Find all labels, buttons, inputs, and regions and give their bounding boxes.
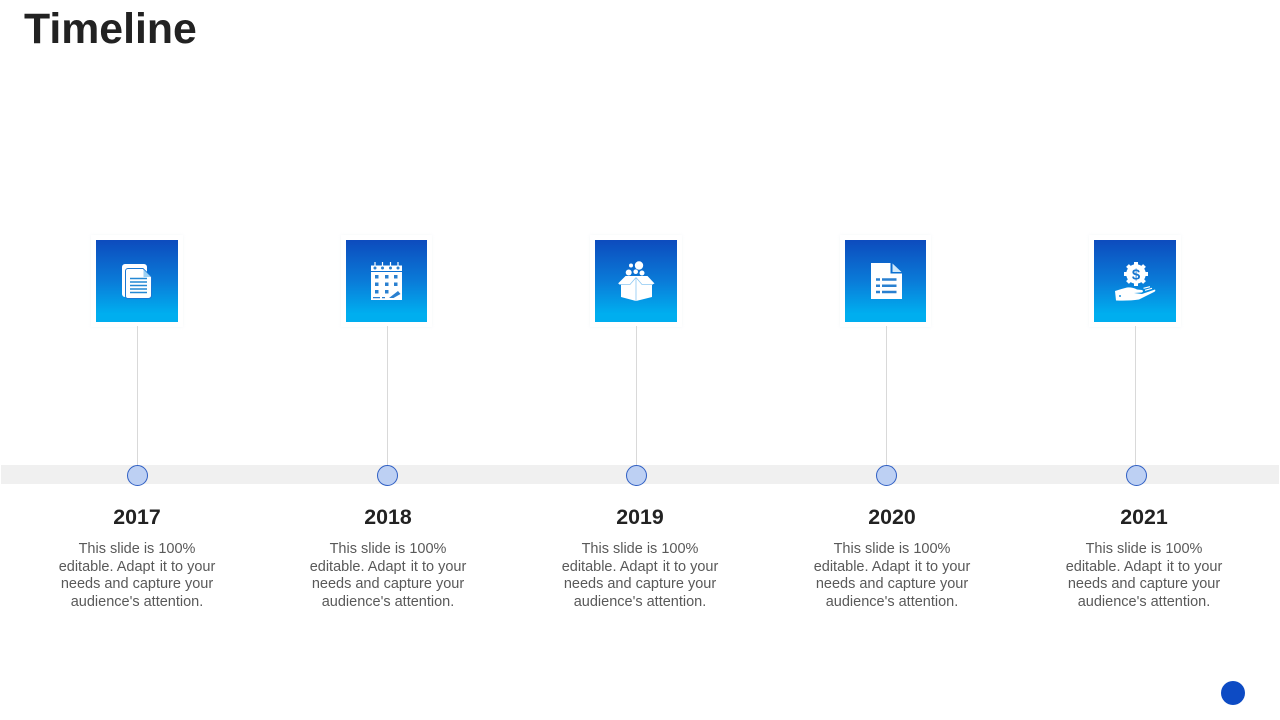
text block 2017: needs and capture your <box>61 576 213 592</box>
text block 2019: needs and capture your <box>564 576 716 592</box>
text block 2020: This slide is 100% <box>834 541 950 557</box>
marker 2019 <box>626 464 647 486</box>
text block 2019: 2019 <box>616 505 664 529</box>
text block 2020: needs and capture your <box>816 576 968 592</box>
timeline band <box>1 465 1279 484</box>
connector 2020 <box>886 326 887 466</box>
marker 2021 <box>1126 464 1146 486</box>
icon card: money gear in hand: $ <box>1132 266 1141 284</box>
text block 2017: 2017 <box>113 505 161 529</box>
icon card: list document <box>840 235 931 327</box>
marker 2020 <box>876 464 896 486</box>
text block 2018: audience's attention. <box>322 594 454 610</box>
text block 2020: editable. Adapt it to your <box>814 559 970 575</box>
text block 2019: This slide is 100% <box>582 541 698 557</box>
connector 2019 <box>636 326 637 466</box>
text block 2021: audience's attention. <box>1078 594 1210 610</box>
title: Timeline <box>24 5 197 53</box>
text block 2018 <box>310 505 466 610</box>
text block 2021: This slide is 100% <box>1086 541 1202 557</box>
text block 2017: audience's attention. <box>71 594 203 610</box>
marker 2017 <box>127 464 148 486</box>
text block 2017: This slide is 100% <box>79 541 195 557</box>
icon card: documents <box>91 235 183 327</box>
connector 2021 <box>1135 326 1136 466</box>
text block 2017 <box>59 505 216 610</box>
connector 2018 <box>387 326 388 466</box>
text block 2021: editable. Adapt it to your <box>1066 559 1222 575</box>
text block 2018: editable. Adapt it to your <box>310 559 466 575</box>
icon card: calendar <box>341 235 432 327</box>
text block 2018: needs and capture your <box>312 576 464 592</box>
icon card: money gear in hand <box>1089 235 1181 327</box>
text block 2018: This slide is 100% <box>330 541 446 557</box>
text block 2020: 2020 <box>868 505 916 529</box>
text block 2021: 2021 <box>1120 505 1168 529</box>
marker 2018 <box>376 464 398 486</box>
text block 2019: editable. Adapt it to your <box>562 559 718 575</box>
text block 2020: audience's attention. <box>826 594 958 610</box>
text block 2021: needs and capture your <box>1068 576 1220 592</box>
icon card: open box <box>590 235 682 327</box>
text block 2019 <box>562 505 718 610</box>
text block 2020 <box>814 505 970 610</box>
text block 2018: 2018 <box>364 505 412 529</box>
text block 2019: audience's attention. <box>574 594 706 610</box>
corner dot <box>1221 681 1245 705</box>
text block 2017: editable. Adapt it to your <box>59 559 215 575</box>
connector 2017 <box>137 326 138 466</box>
text block 2021 <box>1066 505 1222 610</box>
